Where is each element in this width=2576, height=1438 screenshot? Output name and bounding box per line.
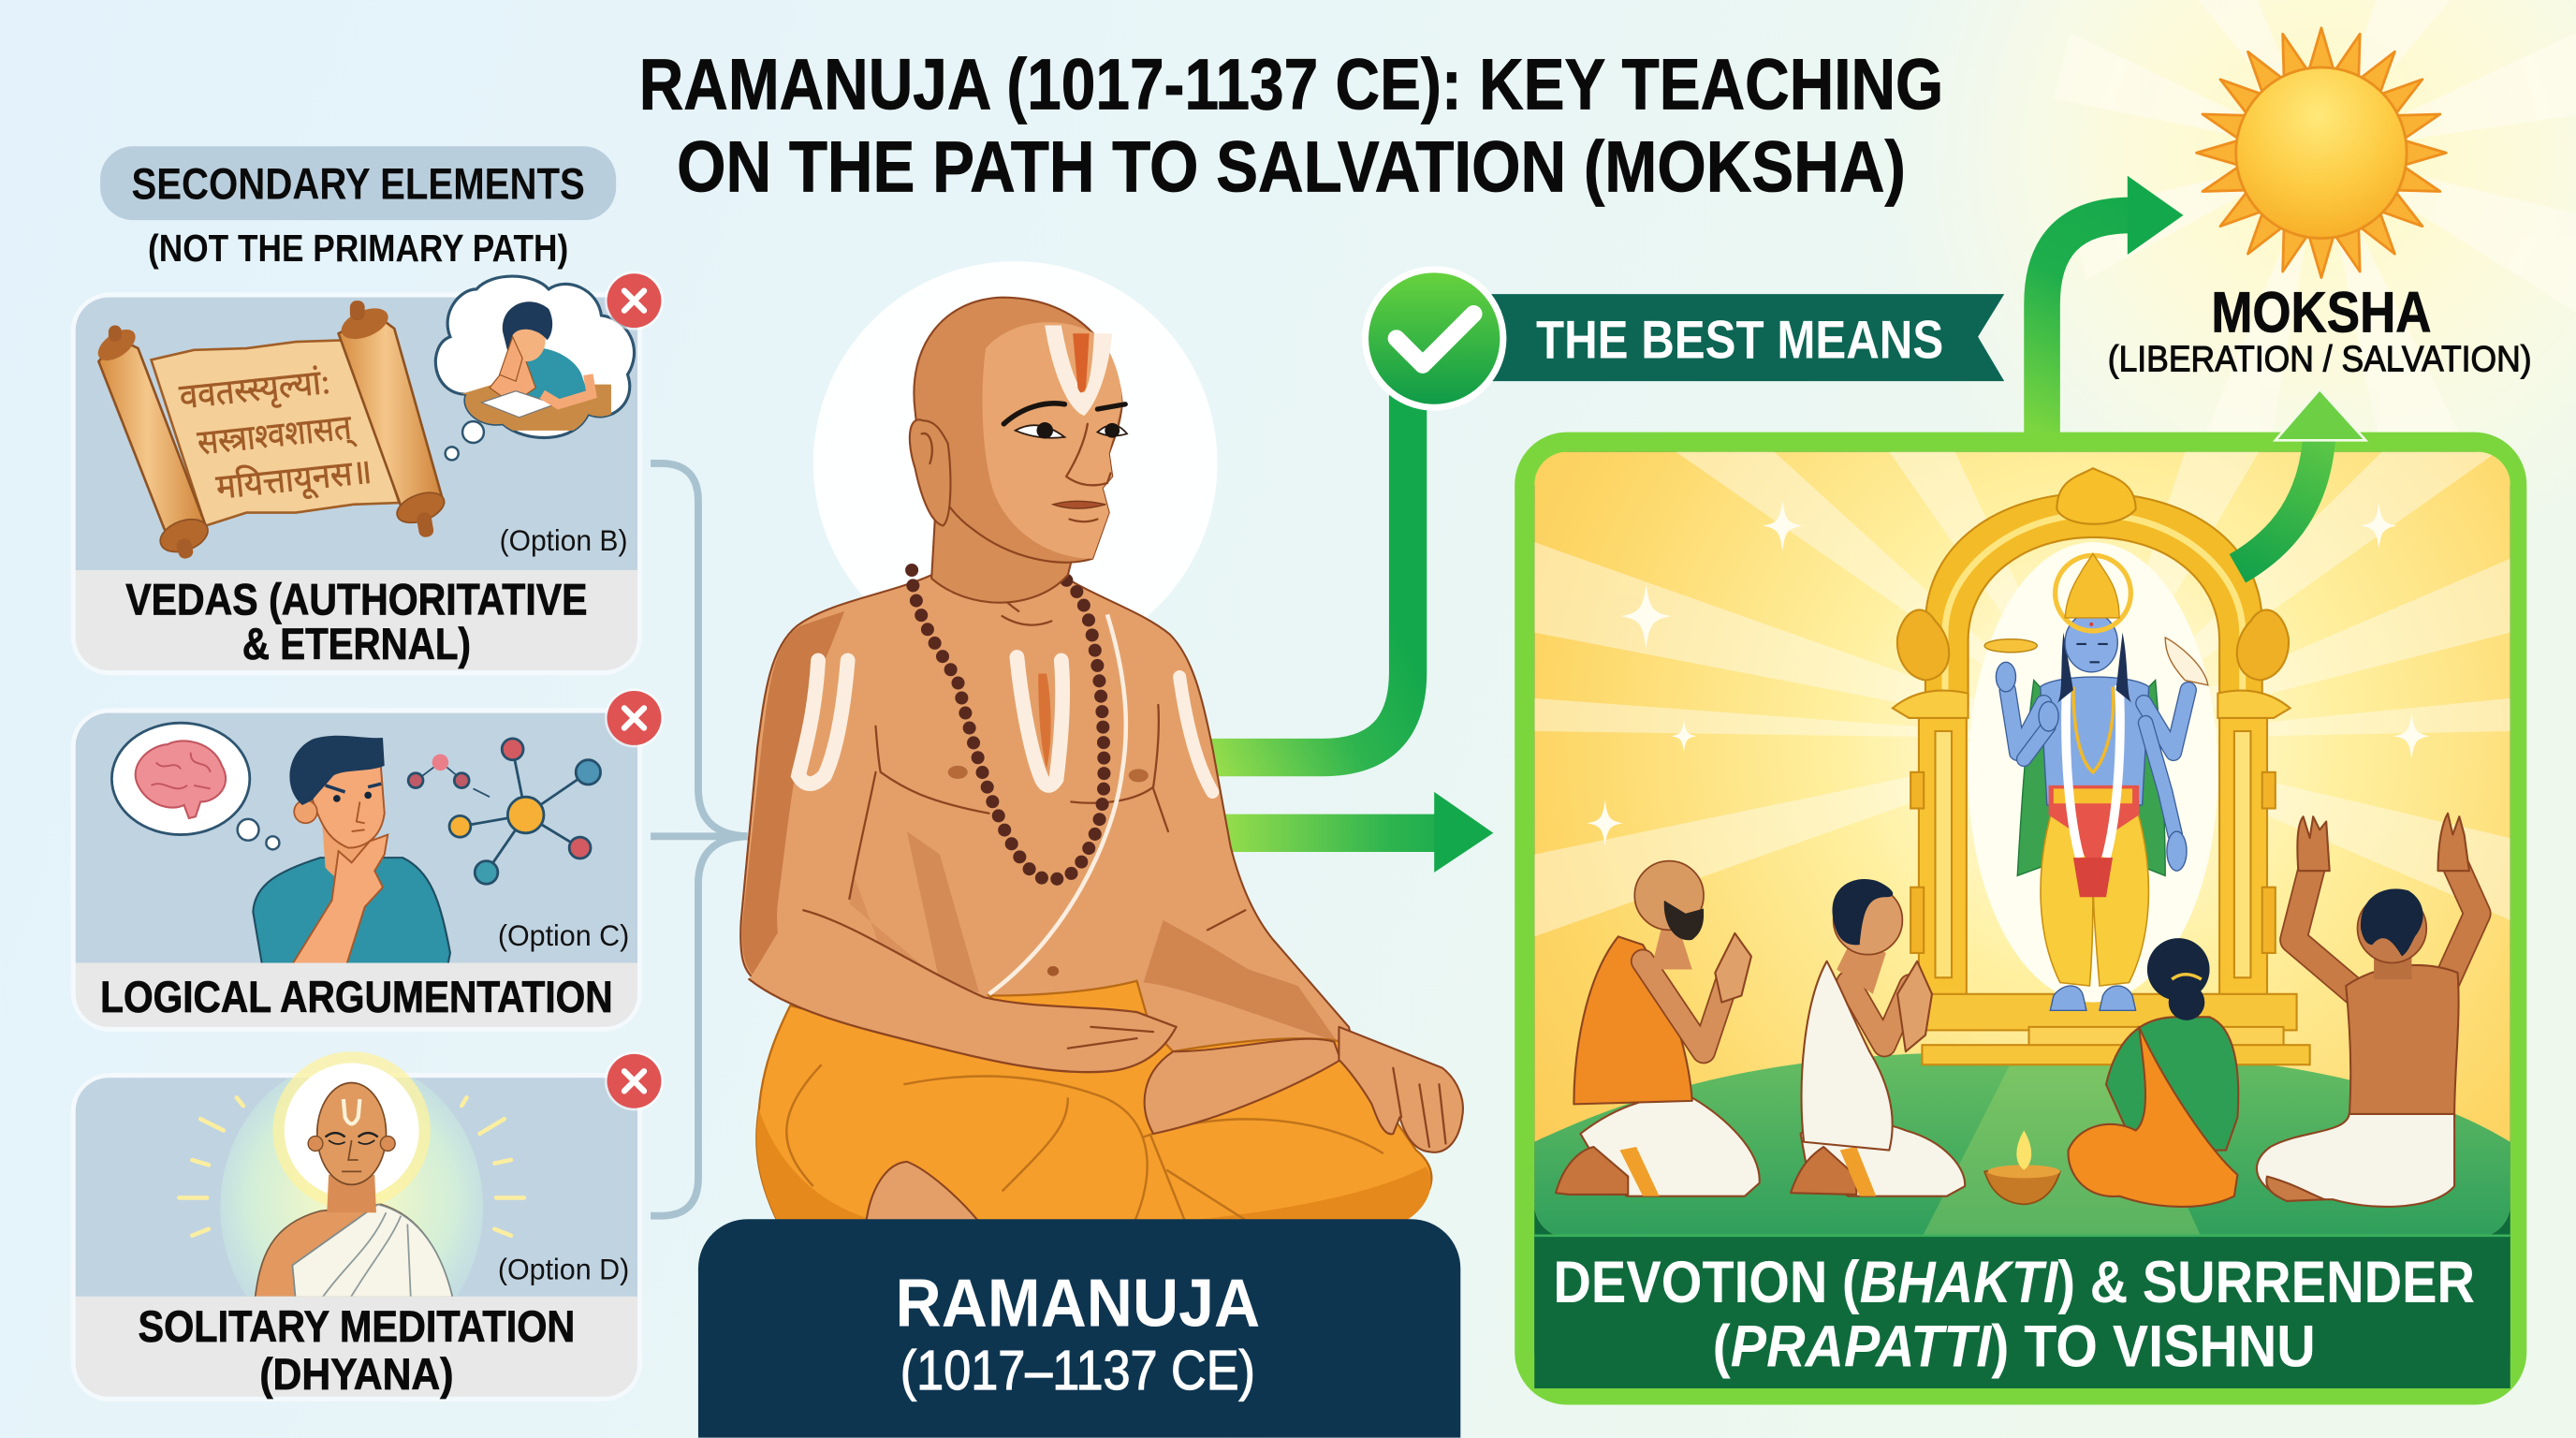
caption band: (PRAPATTI) TO VISHNU [1713,1313,2316,1379]
heading pill: secondary elements: SECONDARY ELEMENTS [131,159,585,209]
foot [1145,1039,1340,1134]
face features [1003,404,1064,424]
sun glow [1878,0,2576,596]
nameplate [698,1219,1460,1438]
title [639,45,1943,207]
panel: logical argumentation card [71,708,642,1032]
figure head [910,298,1127,603]
icon: scroll [93,301,448,560]
moksha label [2108,281,2532,380]
head [2056,633,2132,703]
arrow: Ramanuja to the best means [1199,394,1408,757]
card title: logical argumentation: LOGICAL ARGUMENTATION [100,973,613,1022]
icon: thinking man [253,736,450,969]
caption band [1534,1236,2510,1388]
figure: seated woman [2069,938,2238,1207]
icon: brain thought bubble [111,723,279,849]
arrow: panel to moksha sun [2042,176,2183,444]
bracket connector from cards to Ramanuja [651,463,748,1216]
right hand on knee [1339,1027,1463,1152]
icon: red cross D [605,1051,664,1110]
scroll text: सस्त्राश्वशासत् [196,407,358,464]
heading pill: secondary elements [100,146,616,220]
temple arch [1893,468,2310,1064]
icon: thought cloud with student [435,276,635,460]
sacred thread [989,614,1126,994]
caption band: DEVOTION (BHAKTI) & SURRENDER [1553,1250,2475,1315]
figure: Ramanuja [740,298,1463,1224]
title: RAMANUJA (1017-1137 CE): KEY TEACHING [639,45,1943,125]
inner glow of shrine [1969,542,2217,1003]
tilaka marks [798,657,1212,792]
option B tag: (Option B) [500,523,627,557]
panel: vedas card [71,276,642,675]
figure body [740,559,1463,1224]
subheading: not the primary path: (NOT THE PRIMARY PATH) [148,227,568,270]
forehead tilaka [1045,325,1112,416]
icon: red cross B [605,271,664,330]
dhoti [756,981,1431,1224]
scroll text: ववतस्स्यृल्यां: [178,362,332,418]
panel: devotion and surrender [1515,433,2526,1405]
card title: vedas: VEDAS (AUTHORITATIVE [125,575,587,624]
title: ON THE PATH TO SALVATION (MOKSHA) [677,126,1906,207]
nameplate: RAMANUJA [896,1266,1260,1341]
halo behind Ramanuja [813,261,1218,666]
figure: Vishnu [1984,553,2208,1010]
moksha label: MOKSHA [2211,281,2431,345]
arms [2008,690,2188,835]
card title: solitary meditation: (DHYANA) [259,1350,453,1400]
option C tag: (Option C) [498,918,629,952]
icon: sun [2197,28,2446,278]
option D tag: (Option D) [498,1252,629,1285]
figure: kneeling devotee in white [1791,879,1965,1196]
icon: red cross C [605,688,664,748]
card title: vedas [125,575,587,669]
figure: kneeling ascetic [1556,861,1760,1196]
banner: the best means: THE BEST MEANS [1536,311,1943,371]
scroll text [178,359,373,512]
necklace [912,570,1104,879]
panel: solitary meditation card [71,1051,642,1401]
scene: temple and devotees [1534,452,2510,1238]
card title: solitary meditation: SOLITARY MEDITATION [138,1302,575,1352]
icon: meditating monk [177,1051,526,1297]
icon: logic network [408,739,601,884]
nameplate: (1017–1137 CE) [900,1339,1255,1401]
chakra and conch [1984,639,2037,653]
card title: solitary meditation [138,1302,575,1400]
arrow: Ramanuja to devotion panel [1219,792,1493,873]
light rays [1534,452,2510,936]
scroll text: मयित्तायूनस॥ [214,451,373,509]
icon: oil lamp [1984,1130,2060,1204]
card title: vedas: & ETERNAL) [242,620,471,669]
sparkles [1587,501,2430,846]
banner: the best means [1486,294,2004,381]
moksha label: (LIBERATION / SALVATION) [2108,340,2532,380]
arrow: Vishnu to moksha [2237,389,2365,568]
left forearm and hand [750,932,1165,1071]
ground [1534,1051,2510,1238]
icon: green check [1362,266,1506,411]
figure: devotee with raised arms [2257,814,2478,1207]
